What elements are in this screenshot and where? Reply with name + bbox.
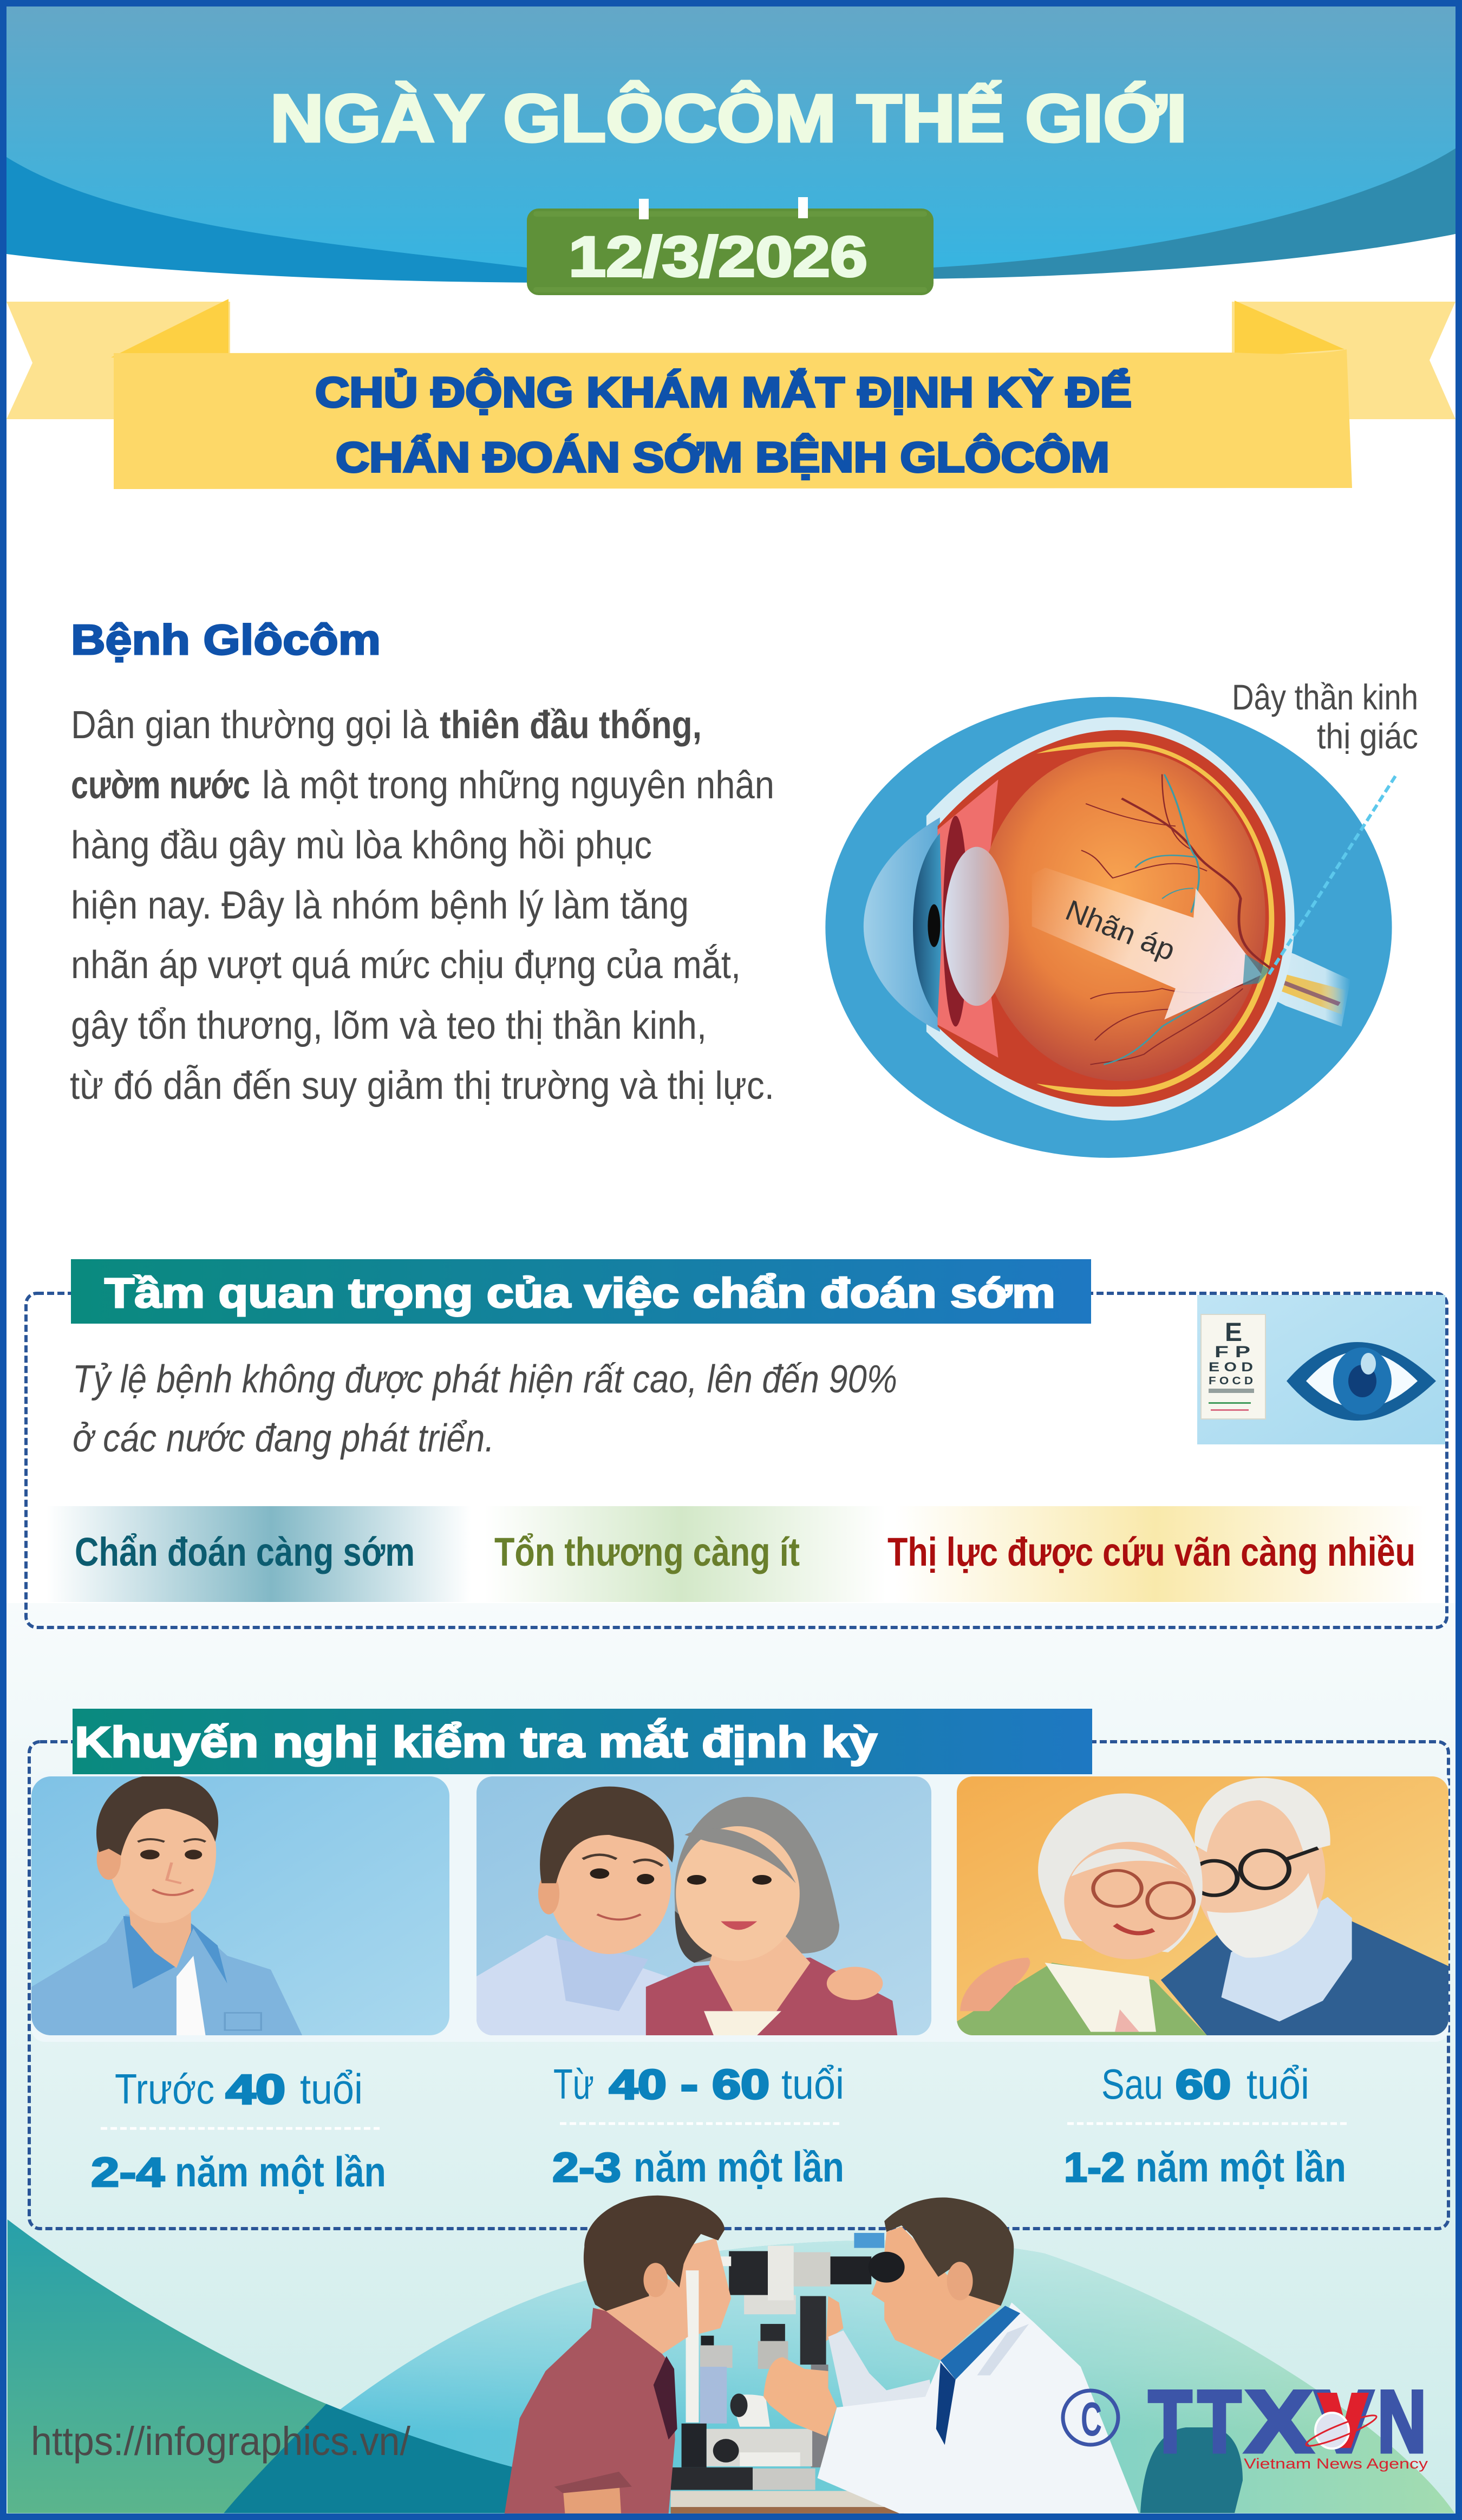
TTXVN logo: V <box>1315 2373 1373 2471</box>
chair back <box>1140 2427 1243 2513</box>
paragraph: definition: từ đó dẫn đến suy giảm thị trường và thị lực. <box>70 1064 774 1108</box>
TTXVN logo: Vietnam News Agency <box>1244 2456 1428 2472</box>
panel frame <box>26 1293 1447 1627</box>
sclera <box>926 717 1295 1121</box>
panel frame <box>29 1742 1448 2229</box>
paragraph: definition: thiên đầu thống, <box>440 704 702 747</box>
banner headline: CHỦ ĐỘNG KHÁM MẮT ĐỊNH KỲ ĐỂ <box>315 368 1132 416</box>
eye diagram <box>825 697 1395 1158</box>
paragraph: definition: nhãn áp vượt quá mức chịu đựng của mắt, <box>71 943 741 987</box>
section heading bar <box>73 1709 1092 1774</box>
slit lamp <box>671 2233 904 2514</box>
photo: over 60 <box>957 1776 1448 2035</box>
bottom hills background <box>8 2219 1454 2513</box>
photo: 40 to 60 <box>477 1776 931 2035</box>
cornea <box>864 817 940 1032</box>
column: under 40 <box>91 2065 386 2196</box>
copyright mark <box>1063 2391 1118 2446</box>
illustration: eye examination <box>505 2196 1139 2514</box>
image: eye chart and eye icon <box>1197 1295 1445 1444</box>
patient <box>505 2196 731 2514</box>
step: less damage: Tổn thương càng ít <box>494 1529 800 1574</box>
paragraph: definition: hiện nay. Đây là nhóm bệnh lý làm tăng <box>71 884 689 927</box>
column: over 60: năm một lần <box>1135 2143 1346 2191</box>
column: 40 to 60: 40 - 60 <box>609 2062 769 2108</box>
banner headline <box>315 368 1132 481</box>
label: optic nerve: thị giác <box>1317 716 1418 756</box>
nerve head <box>1243 954 1270 985</box>
copyright mark: C <box>1081 2392 1102 2446</box>
column: 40 to 60: năm một lần <box>634 2143 844 2191</box>
paragraph: definition: hàng đầu gây mù lòa không hồi phục <box>71 824 652 867</box>
column: over 60 <box>1064 2060 1347 2191</box>
pupil <box>928 904 941 947</box>
lens <box>944 847 1009 1006</box>
step: diagnose early: Chẩn đoán càng sớm <box>75 1529 415 1574</box>
gradient chain <box>47 1506 1427 1602</box>
image: eye chart and eye icon: E O D <box>1209 1360 1253 1375</box>
pink wedge <box>938 779 998 1058</box>
TTXVN logo: N <box>1378 2373 1426 2471</box>
column: under 40: năm một lần <box>175 2148 386 2196</box>
paragraph: definition: Dân gian thường gọi là <box>71 704 429 747</box>
section heading bar: Khuyến nghị kiểm tra mắt định kỳ <box>75 1718 878 1766</box>
ciliary <box>943 816 968 1026</box>
yellow layer <box>1036 741 1274 1096</box>
column: 40 to 60: tuổi <box>781 2060 844 2108</box>
TTXVN logo: T <box>1198 2373 1241 2471</box>
panel: recommendations <box>29 1709 1448 2229</box>
date badge: 12/3/2026 <box>569 225 867 289</box>
TTXVN logo: X <box>1245 2373 1313 2471</box>
column: under 40: tuổi <box>300 2065 363 2113</box>
statistic text: Tỷ lệ bệnh không được phát hiện rất cao, lên đến 90% <box>73 1358 897 1401</box>
image: eye chart and eye icon: F P <box>1215 1343 1250 1361</box>
paragraph: definition: gây tổn thương, lõm và teo thị thần kinh, <box>71 1004 707 1047</box>
doctor <box>763 2197 1139 2514</box>
image: eye chart and eye icon: E <box>1225 1318 1242 1347</box>
website url: https://infographics.vn/ <box>31 2419 410 2464</box>
column: over 60: 60 <box>1176 2062 1231 2108</box>
heading: Bệnh Glôcôm: Bệnh Glôcôm <box>71 616 381 663</box>
column: over 60: 1-2 <box>1064 2145 1125 2191</box>
TTXVN logo <box>1148 2373 1428 2472</box>
panel: early diagnosis <box>26 1259 1447 1627</box>
optic nerve <box>1261 947 1350 1026</box>
column: over 60: Sau <box>1101 2060 1163 2108</box>
date badge <box>527 197 934 295</box>
column: under 40: 40 <box>226 2067 285 2113</box>
column: 40 to 60 <box>552 2060 844 2191</box>
column: over 60: tuổi <box>1246 2060 1309 2108</box>
paragraph: definition: là một trong những nguyên nhân <box>262 764 774 807</box>
column: 40 to 60: 2-3 <box>552 2145 621 2191</box>
title: NGÀY GLÔCÔM THẾ GIỚI <box>270 81 1187 156</box>
image: eye chart and eye icon: F O C D <box>1209 1375 1253 1387</box>
label: Nhãn áp: Nhãn áp <box>1061 894 1180 967</box>
label: optic nerve: Dây thần kinh <box>1232 677 1418 717</box>
retinal vessels <box>1081 774 1270 1065</box>
header dome <box>6 6 1456 283</box>
statistic text <box>73 1358 897 1460</box>
photo: under 40 <box>31 1774 449 2035</box>
column: under 40: 2-4 <box>91 2150 165 2196</box>
iris <box>913 833 942 1018</box>
ribbon banner <box>6 299 1456 489</box>
lower page background tint <box>0 1603 1462 2520</box>
column: 40 to 60: Từ <box>553 2060 594 2108</box>
section heading bar: Tầm quan trọng của việc chẩn đoán sớm <box>105 1270 1055 1317</box>
TTXVN logo: T <box>1148 2373 1192 2471</box>
banner headline: CHẨN ĐOÁN SỚM BỆNH GLÔCÔM <box>336 433 1109 481</box>
label: optic nerve <box>1232 677 1418 756</box>
section heading bar <box>71 1259 1091 1324</box>
pressure arrow <box>1032 868 1262 1020</box>
eye backdrop <box>825 697 1392 1158</box>
statistic text: ở các nước đang phát triển. <box>73 1417 494 1460</box>
outer red wall <box>938 730 1285 1106</box>
paragraph: definition: cườm nước <box>71 764 250 807</box>
column: under 40: Trước <box>115 2065 214 2113</box>
dashed pointer <box>1268 776 1395 976</box>
photo strip backing <box>31 1771 1448 2042</box>
eyeball interior <box>978 750 1265 1081</box>
paragraph: definition <box>70 704 774 1108</box>
